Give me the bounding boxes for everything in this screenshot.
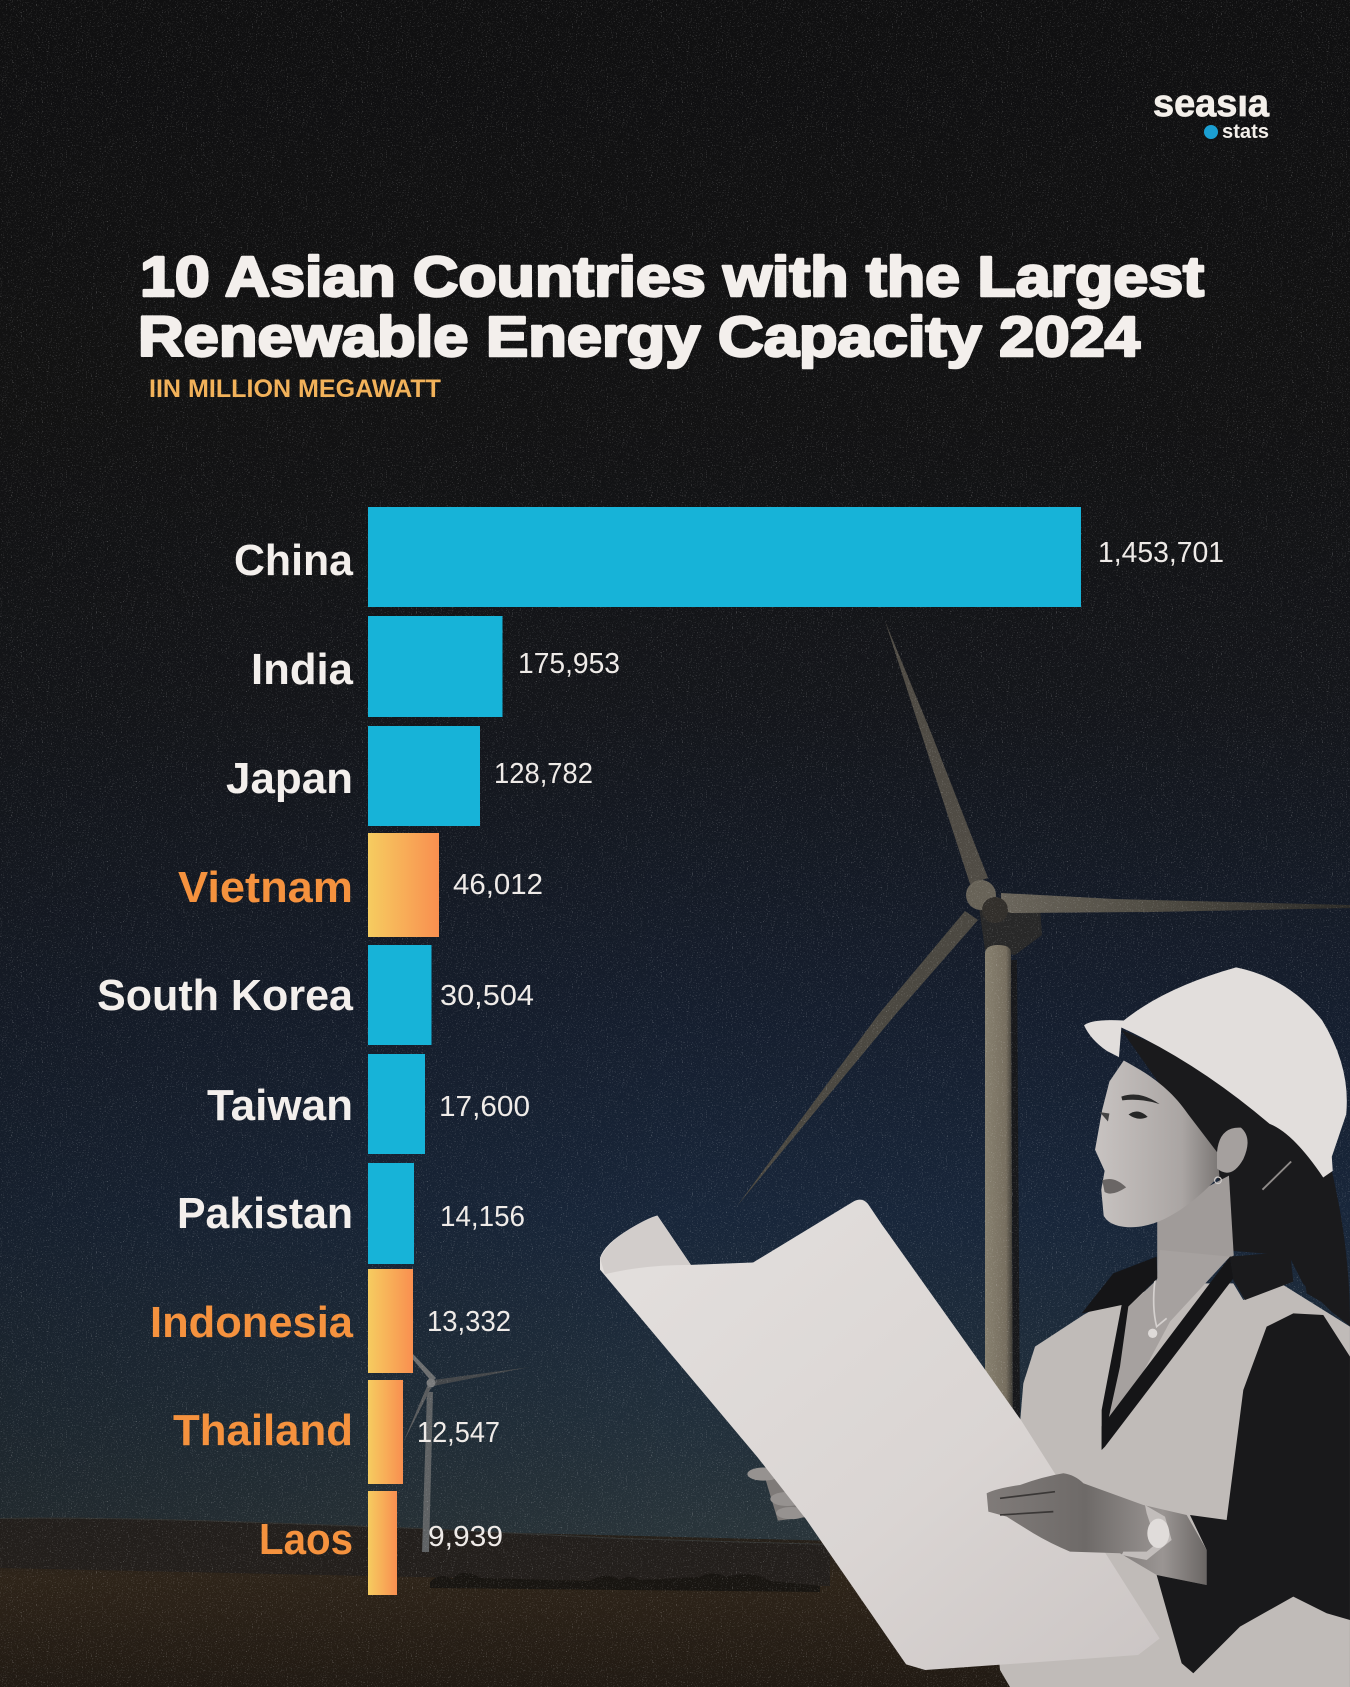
row: South Korea: South Korea: [97, 971, 354, 1020]
face: [1095, 1060, 1219, 1227]
logo: seasia stats: seasıa: [1153, 83, 1270, 125]
row: Vietnam: Vietnam: [178, 863, 353, 912]
row: Pakistan: 14,156: [440, 1201, 525, 1233]
row: Laos: Laos: [259, 1515, 353, 1564]
row: Laos: 9,939: [428, 1521, 503, 1553]
far eye: [1100, 1112, 1109, 1122]
subtitle: unit: IIN MILLION MEGAWATT: [149, 375, 441, 403]
neck: [1157, 1176, 1234, 1298]
row: Vietnam: 46,012: [453, 869, 543, 901]
finger lines: [1000, 1492, 1055, 1515]
dark sleeve: [1157, 1313, 1350, 1673]
row: Indonesia: Indonesia: [150, 1298, 354, 1347]
bar chart: [97, 507, 1224, 1595]
row: Thailand: 12,547: [417, 1417, 500, 1449]
row: Pakistan: [177, 1163, 525, 1264]
row: Japan: [226, 726, 593, 826]
row: India: 175,953: [518, 648, 620, 680]
right collar: [1230, 1252, 1293, 1300]
blueprint paper: [600, 1200, 1160, 1670]
chest: [1102, 1250, 1230, 1450]
row: South Korea: [97, 945, 534, 1045]
eyebrow: [1121, 1095, 1160, 1104]
row: South Korea: 30,504: [440, 980, 534, 1012]
ear: [1217, 1128, 1248, 1173]
left hand palm: [763, 1469, 813, 1521]
row: Laos: [259, 1491, 503, 1595]
row: Taiwan: Taiwan: [207, 1081, 353, 1130]
person: engineer with blueprint: [600, 967, 1350, 1687]
title: [138, 245, 1204, 369]
row: China: [234, 507, 1224, 607]
hair clip: [1262, 1162, 1291, 1190]
row: Vietnam: [178, 833, 543, 937]
row: Japan: 128,782: [494, 758, 593, 790]
hair and ponytail: [1121, 1030, 1350, 1326]
row: India: [251, 616, 620, 717]
row: Thailand: [173, 1380, 500, 1484]
title: 10 Asian Countries with the Largest: [140, 245, 1204, 309]
earring: [1215, 1177, 1221, 1184]
row: Taiwan: 17,600: [439, 1091, 530, 1123]
vest: [980, 1283, 1350, 1687]
row: Indonesia: 13,332: [427, 1306, 511, 1338]
title: Renewable Energy Capacity 2024: [138, 305, 1140, 369]
placket: [1102, 1257, 1233, 1450]
row: Indonesia: [150, 1269, 511, 1373]
landscape: horizon and field: [0, 1518, 1350, 1687]
blueprint and left hand: [600, 1200, 1160, 1670]
forearm and hand: [987, 1473, 1207, 1585]
row: China: China: [234, 536, 354, 585]
eye: [1129, 1111, 1148, 1119]
row: Pakistan: Pakistan: [177, 1189, 353, 1238]
paper curl shading: [600, 1216, 691, 1274]
head and hard hat: [1084, 967, 1350, 1326]
left hand fingers: [747, 1467, 807, 1519]
row: China: 1,453,701: [1098, 537, 1224, 569]
wristwatch: [1122, 1505, 1172, 1560]
row: Taiwan: [207, 1054, 530, 1154]
row: India: India: [251, 645, 354, 694]
left collar: [1082, 1257, 1157, 1450]
torso: [980, 1250, 1350, 1687]
small background wind turbine: [403, 1354, 530, 1552]
large wind turbine: [737, 621, 1350, 1424]
necklace and pendant: [1148, 1280, 1167, 1338]
ponytail strand: [1300, 1250, 1348, 1320]
logo: seasia stats: [1153, 83, 1270, 143]
row: Japan: Japan: [226, 754, 353, 803]
logo: seasia stats: stats: [1222, 121, 1269, 143]
row: Thailand: Thailand: [173, 1406, 353, 1455]
arm, sleeve and watch: [987, 1313, 1350, 1673]
lips: [1102, 1179, 1126, 1194]
hard hat: [1084, 967, 1347, 1177]
